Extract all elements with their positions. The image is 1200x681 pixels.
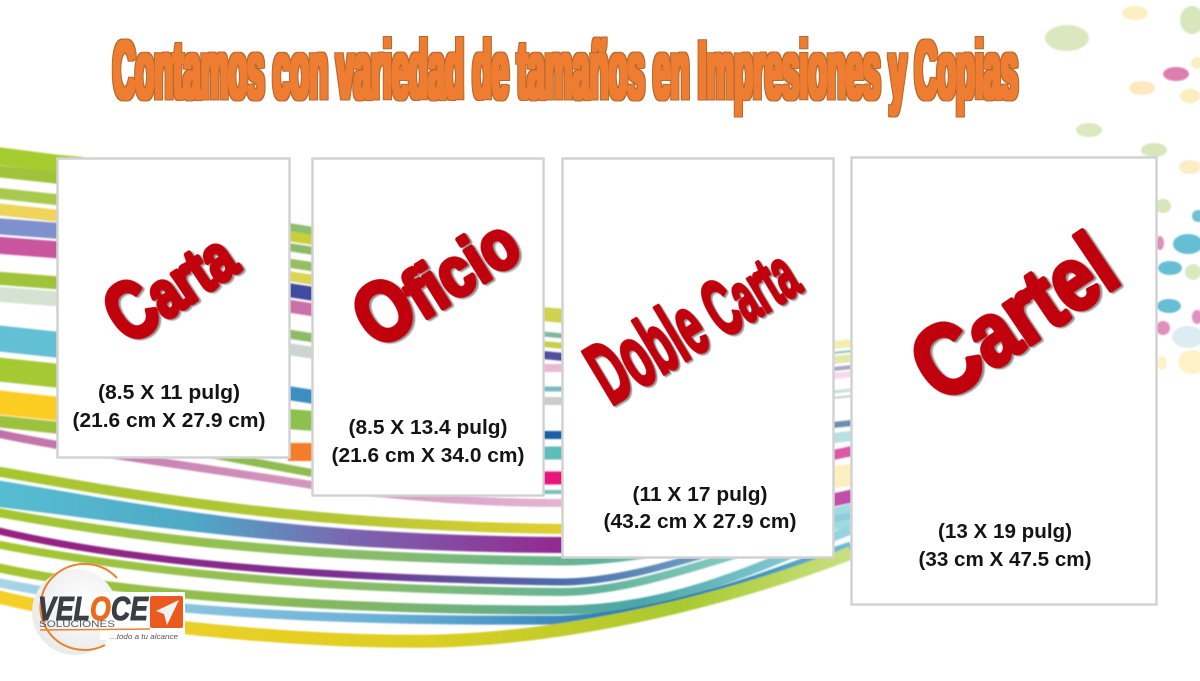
logo: Veloce Soluciones xyxy=(32,564,185,655)
background: curved stripes xyxy=(0,146,852,641)
text: Oficio dimensions xyxy=(332,417,524,467)
panel: Carta xyxy=(58,158,290,458)
heading: Doble Carta: Doble Carta xyxy=(570,221,815,422)
text: Doble Carta dimensions: (11 X 17 pulg) xyxy=(632,484,768,506)
heading: Cartel: Cartel xyxy=(890,206,1136,423)
logo wordmark: VELOCE xyxy=(38,590,149,627)
text: Oficio dimensions: (8.5 X 13.4 pulg) xyxy=(348,417,508,439)
text: Cartel dimensions: (33 cm X 47.5 cm) xyxy=(918,549,1092,571)
text: Cartel dimensions xyxy=(918,521,1092,571)
text: Doble Carta dimensions xyxy=(604,484,796,533)
panel: Cartel xyxy=(852,158,1156,604)
text: Cartel dimensions: (13 X 19 pulg) xyxy=(938,521,1072,543)
heading: Carta: Carta xyxy=(87,209,252,361)
panel: Oficio xyxy=(312,158,544,496)
heading: Oficio: Oficio xyxy=(336,194,535,366)
background: coloured dots xyxy=(1045,6,1200,374)
logo subtitle: SOLUCIONES xyxy=(39,619,115,629)
text: Doble Carta dimensions: (43.2 cm X 27.9 cm) xyxy=(604,511,796,533)
icon: paper plane xyxy=(156,600,179,625)
text: Carta dimensions: (21.6 cm X 27.9 cm) xyxy=(72,410,266,432)
panel: Doble Carta xyxy=(562,158,834,558)
text: Carta dimensions xyxy=(72,382,266,432)
logo tagline: ...todo a tu alcance xyxy=(110,632,178,641)
text: Carta dimensions: (8.5 X 11 pulg) xyxy=(98,382,240,404)
text: Oficio dimensions: (21.6 cm X 34.0 cm) xyxy=(332,445,524,467)
